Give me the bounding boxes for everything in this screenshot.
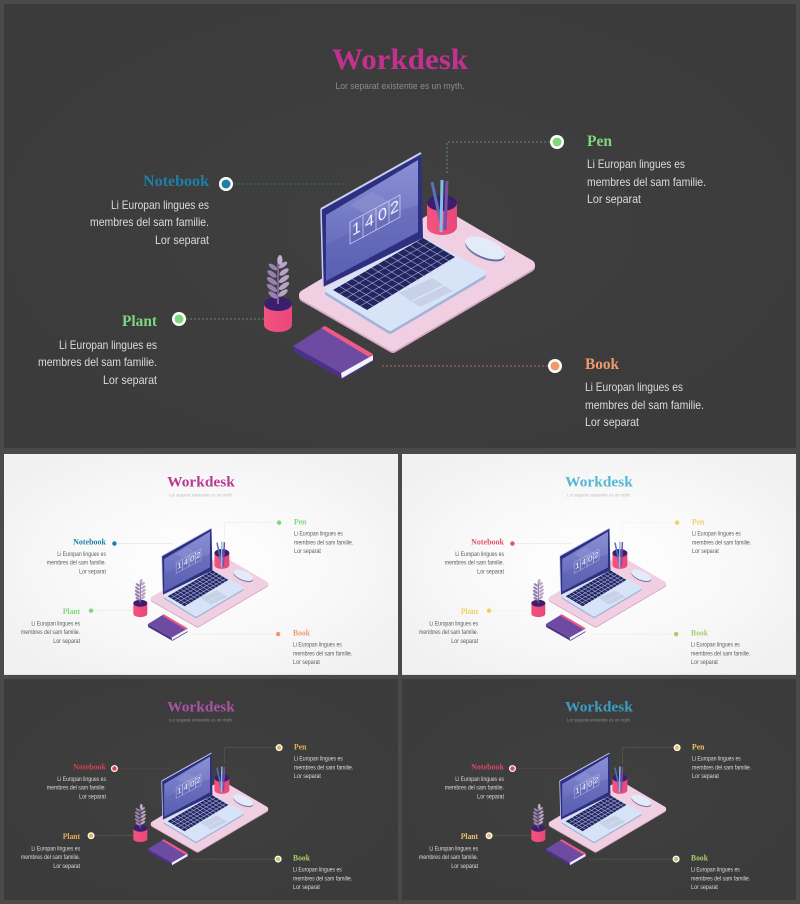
- callout: Plant: Li Europan lingues es: [31, 847, 80, 853]
- callout: Plant: Li Europan lingues es: [429, 622, 478, 628]
- callout: Notebook: membres del sam familie.: [47, 785, 106, 791]
- callout: Notebook: Lor separat: [79, 794, 106, 800]
- callout: Book: [548, 356, 704, 429]
- callout: Notebook: membres del sam familie.: [47, 560, 106, 566]
- clock on laptop screen: 0: [588, 777, 593, 789]
- clock on laptop screen: 2: [594, 774, 599, 786]
- callout: Notebook: membres del sam familie.: [90, 215, 209, 229]
- callout: Book: Lor separat: [585, 415, 640, 429]
- callout: Notebook: Li Europan lingues es: [57, 777, 106, 783]
- callout: Plant: membres del sam familie.: [419, 855, 478, 861]
- callout: Book: membres del sam familie.: [293, 876, 353, 882]
- leader lines: [493, 748, 674, 859]
- panel: dark variant, blue title: [402, 679, 796, 900]
- callout: Notebook: membres del sam familie.: [445, 560, 504, 566]
- callout: Plant: Li Europan lingues es: [429, 847, 478, 853]
- callout: Notebook: Lor separat: [155, 233, 210, 247]
- callout: Notebook: Notebook: [471, 538, 505, 547]
- clock on laptop screen: 4: [184, 781, 188, 793]
- callout: Book: Book: [691, 854, 709, 863]
- callout: Notebook: membres del sam familie.: [445, 785, 504, 791]
- callout: Pen: Lor separat: [587, 192, 642, 206]
- callout: Plant: Lor separat: [103, 373, 158, 387]
- illustration: laptop on desk: [531, 753, 664, 866]
- callout: Book: membres del sam familie.: [293, 651, 353, 657]
- callout: Book: Li Europan lingues es: [691, 643, 740, 649]
- callout: Book: [275, 854, 353, 891]
- clock on laptop screen: 0: [378, 203, 387, 226]
- callout: Book: Lor separat: [293, 885, 320, 891]
- callout: Notebook: [445, 538, 515, 575]
- illustration: laptop on desk: [133, 528, 266, 641]
- callout: Plant: Plant: [461, 832, 478, 841]
- panel: light variant, magenta title: [4, 454, 398, 675]
- clock on laptop screen: 2: [390, 196, 399, 219]
- clock on laptop screen: 2: [196, 774, 201, 786]
- callout: Notebook: [47, 538, 117, 575]
- callout: Pen: membres del sam familie.: [294, 541, 354, 547]
- callout: Plant: membres del sam familie.: [21, 855, 80, 861]
- callout: Notebook: [90, 173, 233, 247]
- callout: Book: Li Europan lingues es: [293, 868, 342, 874]
- callout: Pen: Li Europan lingues es: [692, 757, 741, 763]
- callout: Plant: Lor separat: [53, 639, 80, 645]
- clock on laptop screen: 1: [575, 559, 580, 571]
- title: Workdesk: [565, 474, 634, 490]
- callout: Pen: membres del sam familie.: [294, 766, 354, 772]
- callout: Notebook: Notebook: [143, 173, 209, 190]
- callout: Plant: Lor separat: [53, 864, 80, 870]
- callout: Notebook: Lor separat: [79, 569, 106, 575]
- callout: Plant: Lor separat: [451, 864, 478, 870]
- clock on laptop screen: 1: [177, 559, 182, 571]
- callout: Pen: Pen: [692, 518, 705, 527]
- callout: Book: Lor separat: [293, 660, 320, 666]
- callout: Plant: membres del sam familie.: [38, 355, 157, 369]
- callout: Book: membres del sam familie.: [585, 398, 704, 412]
- subtitle: Lor separat existentie es un myth.: [169, 492, 233, 498]
- callout: Notebook: [445, 763, 516, 800]
- panel: main dark slide: [4, 4, 796, 448]
- callout: Book: membres del sam familie.: [691, 651, 751, 657]
- clock on laptop screen: [575, 549, 599, 571]
- callout: Book: [673, 854, 751, 891]
- callout: Plant: [419, 607, 491, 645]
- callout: Book: Li Europan lingues es: [585, 380, 683, 394]
- callout: Pen: Li Europan lingues es: [692, 532, 741, 538]
- callout: Book: Book: [293, 854, 311, 863]
- panel: light variant, cyan title: [402, 454, 796, 675]
- subtitle: Lor separat existentie es un myth.: [567, 492, 631, 498]
- callout: Book: membres del sam familie.: [691, 876, 751, 882]
- clock on laptop screen: 0: [588, 552, 593, 564]
- callout: Notebook: Li Europan lingues es: [455, 552, 504, 558]
- callout: Book: Lor separat: [691, 660, 718, 666]
- clock on laptop screen: 2: [196, 549, 201, 561]
- illustration: laptop on desk with pen cup, plant and book: [264, 153, 530, 379]
- clock on laptop screen: [575, 774, 599, 796]
- title: Workdesk: [565, 699, 634, 715]
- callout: Pen: Pen: [294, 518, 307, 527]
- clock on laptop screen: 1: [352, 217, 361, 240]
- clock on laptop screen: 2: [594, 549, 599, 561]
- clock on laptop screen: [352, 196, 399, 240]
- callout: Pen: [277, 518, 354, 555]
- callout: Notebook: Li Europan lingues es: [57, 552, 106, 558]
- illustration: laptop on desk: [531, 528, 664, 641]
- callout: Pen: Li Europan lingues es: [294, 532, 343, 538]
- subtitle: Lor separat existentie es un myth.: [169, 717, 233, 723]
- clock on laptop screen: 4: [365, 210, 374, 233]
- callout: Notebook: Notebook: [73, 538, 107, 547]
- callout: Book: [276, 629, 353, 666]
- callout: Plant: [419, 832, 493, 870]
- callout: Pen: Pen: [692, 743, 705, 752]
- callout: Pen: membres del sam familie.: [587, 175, 706, 189]
- callout: Notebook: Notebook: [73, 763, 107, 772]
- callout: Plant: Li Europan lingues es: [59, 338, 157, 352]
- callout: Book: Book: [585, 356, 619, 373]
- leader lines: [186, 142, 550, 366]
- callout: Book: Book: [293, 629, 311, 638]
- callout: Pen: Pen: [587, 133, 612, 150]
- clock on laptop screen: 4: [184, 556, 188, 568]
- clock on laptop screen: 1: [177, 784, 182, 796]
- callout: Plant: membres del sam familie.: [419, 630, 478, 636]
- clock on laptop screen: 0: [190, 777, 195, 789]
- clock on laptop screen: 0: [190, 552, 195, 564]
- callout: Book: Lor separat: [691, 885, 718, 891]
- callout: Book: Li Europan lingues es: [691, 868, 740, 874]
- callout: Pen: [550, 133, 706, 206]
- callout: Plant: membres del sam familie.: [21, 630, 80, 636]
- callout: Pen: Pen: [294, 743, 307, 752]
- leader lines: [95, 523, 276, 634]
- callout: Pen: [675, 518, 752, 555]
- subtitle: Lor separat existentie es un myth.: [336, 81, 464, 92]
- panel: dark variant, purple title: [4, 679, 398, 900]
- callout: Pen: membres del sam familie.: [692, 766, 752, 772]
- leader lines: [493, 523, 674, 634]
- clock on laptop screen: 1: [575, 784, 580, 796]
- callout: Plant: Plant: [122, 313, 158, 330]
- callout: Notebook: Lor separat: [477, 794, 504, 800]
- callout: Pen: Li Europan lingues es: [587, 157, 685, 171]
- callout: Pen: Lor separat: [294, 549, 321, 555]
- subtitle: Lor separat existentie es un myth.: [567, 717, 631, 723]
- clock on laptop screen: [177, 549, 201, 571]
- callout: Pen: Lor separat: [692, 549, 719, 555]
- callout: Pen: Li Europan lingues es: [294, 757, 343, 763]
- title: Workdesk: [167, 699, 236, 715]
- callout: Pen: [276, 743, 354, 780]
- clock on laptop screen: [177, 774, 201, 796]
- callout: Book: Book: [691, 629, 709, 638]
- callout: Pen: membres del sam familie.: [692, 541, 752, 547]
- callout: Plant: Plant: [63, 607, 80, 616]
- callout: Pen: [674, 743, 752, 780]
- callout: Plant: Plant: [63, 832, 80, 841]
- callout: Notebook: Li Europan lingues es: [455, 777, 504, 783]
- callout: Plant: [21, 607, 93, 645]
- callout: Notebook: Li Europan lingues es: [111, 198, 209, 212]
- callout: Book: Li Europan lingues es: [293, 643, 342, 649]
- illustration: laptop on desk: [133, 753, 266, 866]
- callout: Plant: Plant: [461, 607, 478, 616]
- callout: Plant: [38, 312, 186, 387]
- callout: Pen: Lor separat: [692, 774, 719, 780]
- title: Workdesk: [332, 43, 468, 76]
- clock on laptop screen: 4: [582, 556, 586, 568]
- callout: Book: [674, 629, 751, 666]
- leader lines: [95, 748, 276, 859]
- callout: Plant: [21, 832, 95, 870]
- title: Workdesk: [167, 474, 236, 490]
- callout: Plant: Lor separat: [451, 639, 478, 645]
- callout: Notebook: Notebook: [471, 763, 505, 772]
- clock on laptop screen: 4: [582, 781, 586, 793]
- callout: Plant: Li Europan lingues es: [31, 622, 80, 628]
- callout: Notebook: [47, 763, 118, 800]
- callout: Notebook: Lor separat: [477, 569, 504, 575]
- callout: Pen: Lor separat: [294, 774, 321, 780]
